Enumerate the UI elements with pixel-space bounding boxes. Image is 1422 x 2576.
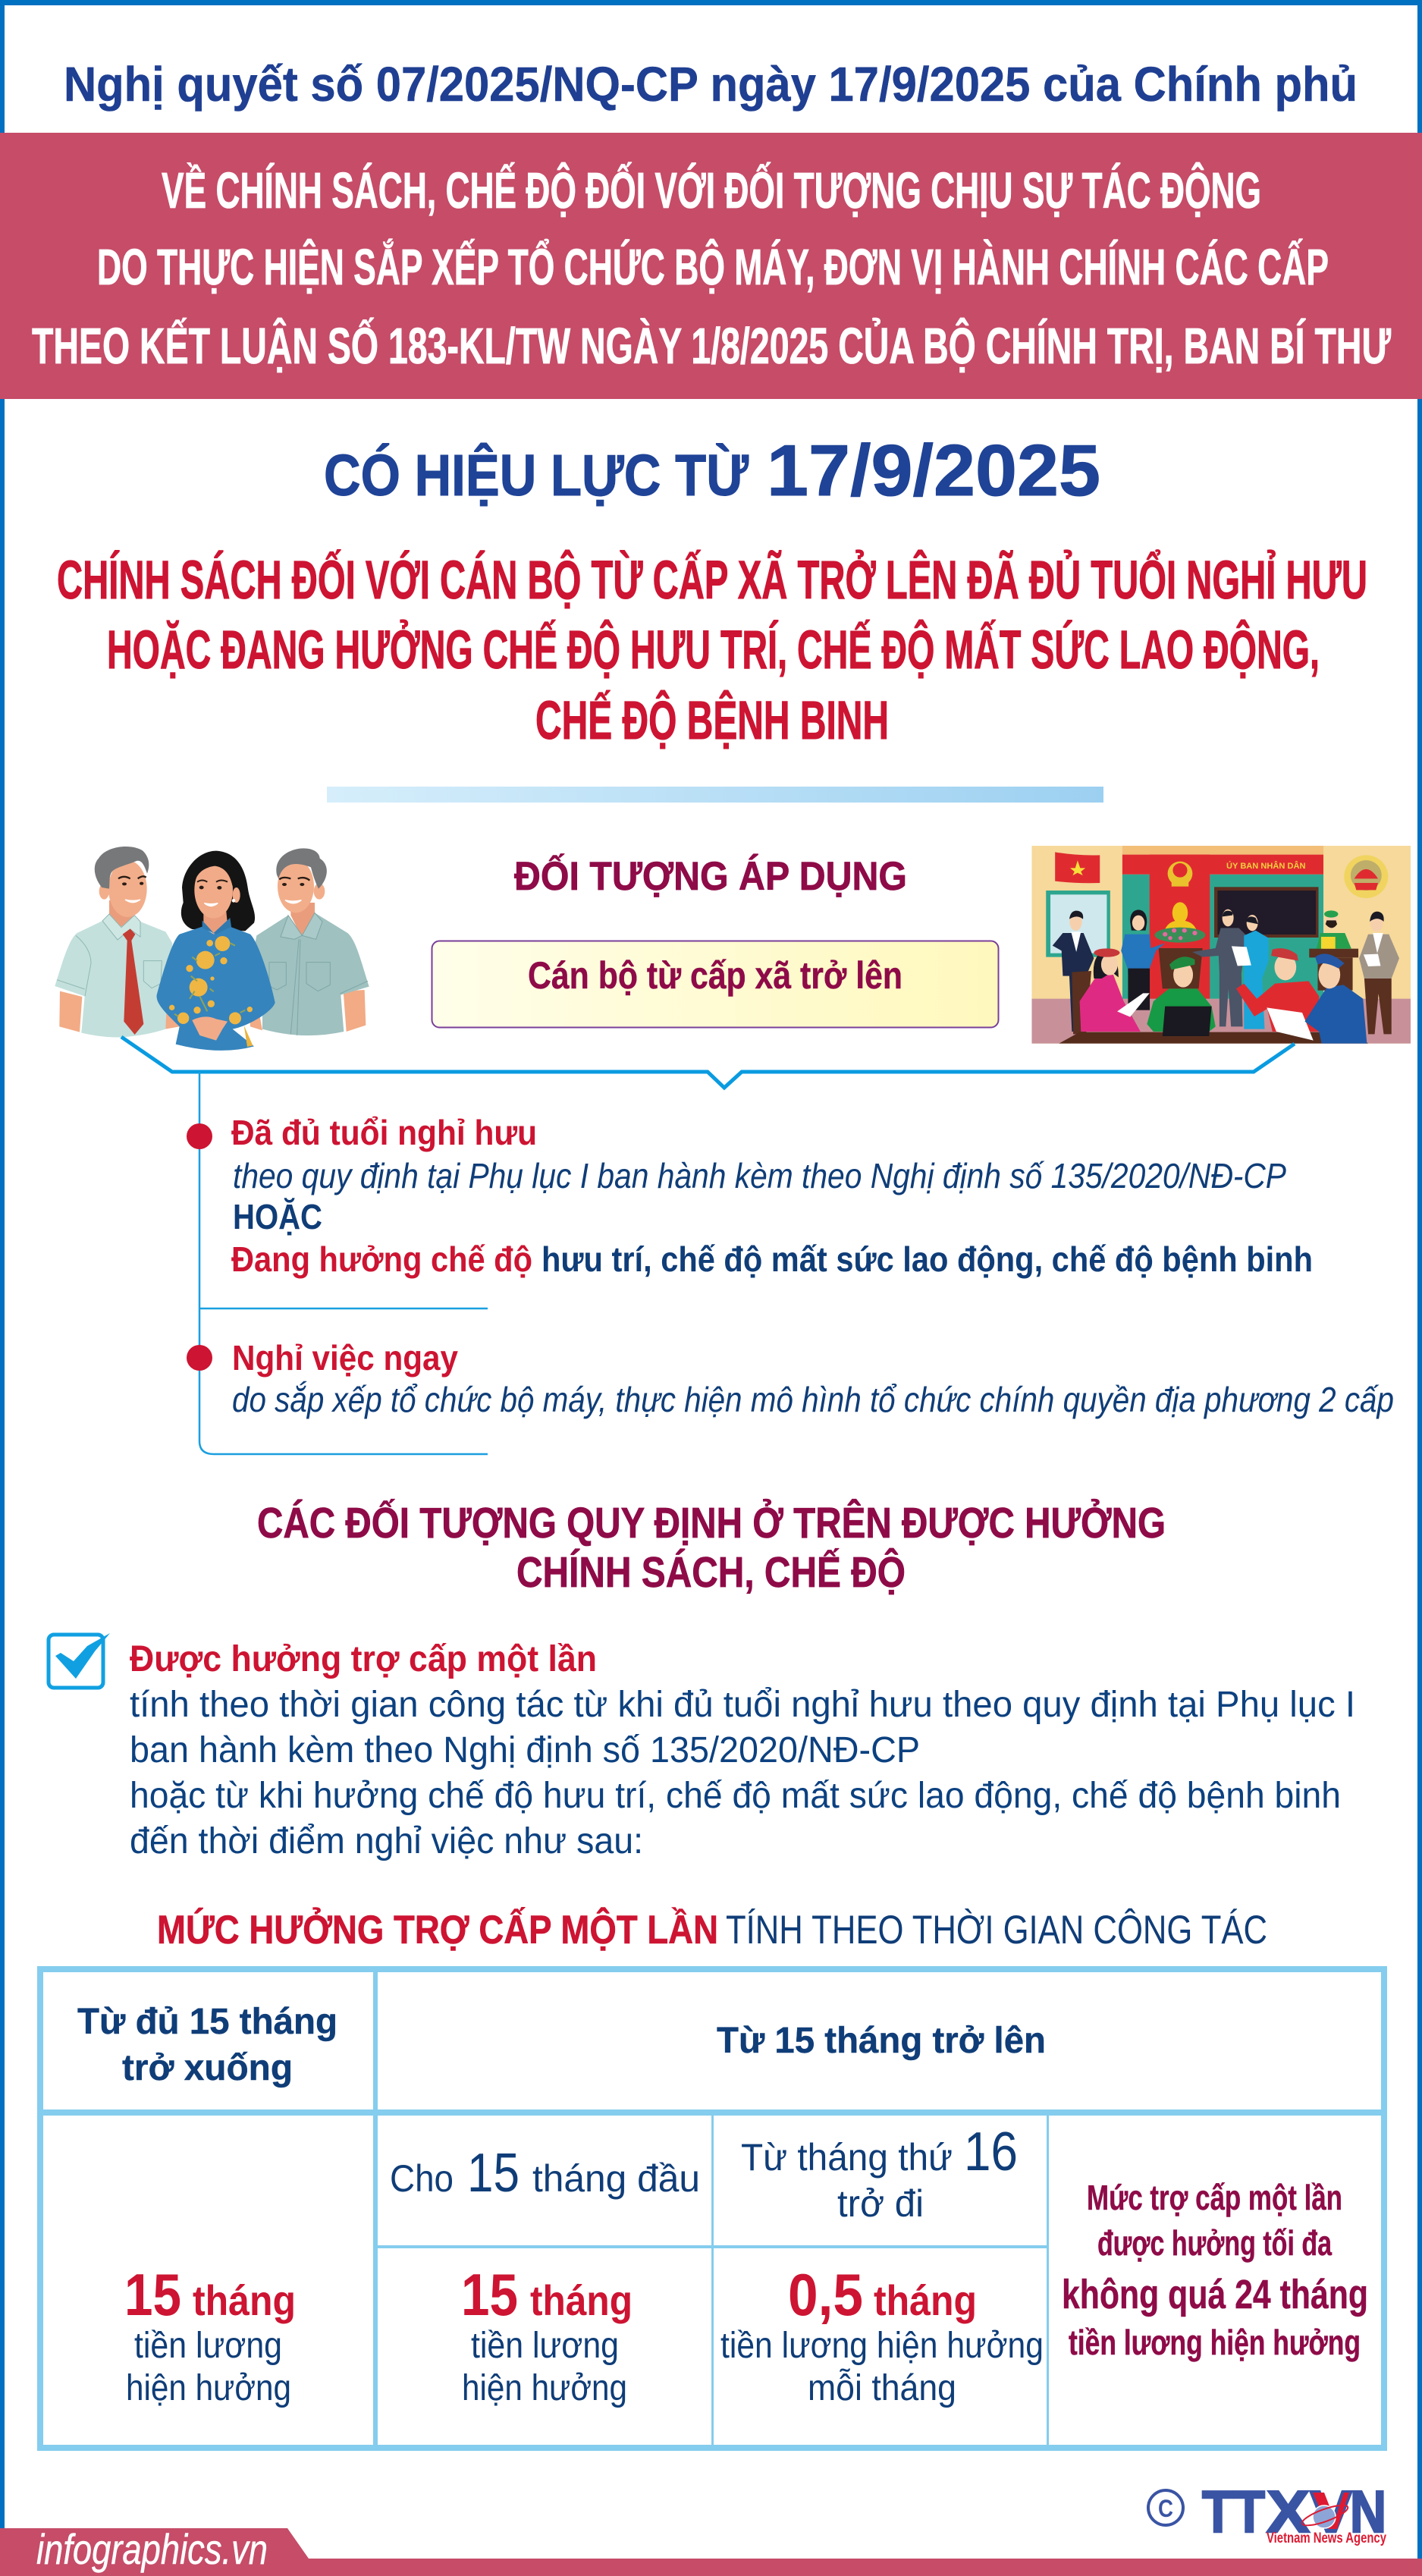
table	[1059, 1032, 1368, 1044]
header: up to 15 months: trở xuống	[122, 2048, 293, 2088]
sub-header: from 16th month	[741, 2122, 1018, 2225]
sub-header: first 15 months: Cho	[390, 2157, 454, 2200]
timeline lines	[199, 1072, 488, 1454]
cell: 0.5 month	[720, 2261, 1044, 2408]
sub-header: from 16th month: 16	[964, 2122, 1018, 2182]
title: Nghị quyết số 07/2025/NQ-CP ngày 17/9/2025 của Chính phủ	[64, 57, 1358, 112]
icon: checkbox	[49, 1633, 110, 1688]
table heading	[157, 1906, 1267, 1952]
logo: TTXVN: X	[1267, 2478, 1310, 2545]
standing woman	[1121, 909, 1165, 1010]
benefit paragraph: hoặc từ khi hưởng chế độ hưu trí, chế độ mất sức lao động, chế độ bệnh binh	[130, 1776, 1341, 1816]
image: commune officials scene	[1031, 846, 1411, 1044]
cell: 15 months: 15	[124, 2261, 181, 2328]
bullet	[187, 1345, 212, 1371]
sub-header: first 15 months	[390, 2143, 700, 2204]
gradient divider	[327, 787, 1103, 803]
icon: three officials	[55, 847, 369, 1051]
benefit table	[37, 1966, 1387, 2451]
header: up to 15 months	[77, 2002, 337, 2088]
section heading: benefits: CÁC ĐỐI TƯỢNG QUY ĐỊNH Ở TRÊN ĐƯỢC HƯỞNG	[257, 1498, 1166, 1547]
cell: 15 months: hiện hưởng	[126, 2368, 291, 2408]
cell: maximum: được hưởng tối đa	[1097, 2223, 1332, 2263]
effective date: CÓ HIỆU LỰC TỪ	[324, 442, 749, 508]
cell: 15 months second	[461, 2261, 633, 2408]
table heading: MỨC HƯỞNG TRỢ CẤP MỘT LẦN	[157, 1906, 718, 1952]
cell: 15 months	[124, 2261, 296, 2408]
logo: TTXVN: TT	[1202, 2478, 1265, 2545]
cell: 15 months second: 15	[461, 2261, 518, 2328]
subject box: Cán bộ từ cấp xã trở lên	[528, 954, 902, 997]
benefit paragraph	[130, 1639, 1355, 1861]
copyright mark: C	[1158, 2495, 1173, 2522]
cell: 0.5 month: 0,5	[788, 2261, 863, 2328]
benefit paragraph: ban hành kèm theo Nghị định số 135/2020/NĐ-CP	[130, 1730, 920, 1770]
red heading: CHẾ ĐỘ BỆNH BINH	[535, 690, 889, 751]
footer bar	[0, 2525, 1422, 2576]
cell: 15 months second: tiền lương	[471, 2326, 619, 2366]
cell: 0.5 month: tiền lương hiện hưởng	[720, 2326, 1044, 2366]
logo: TTXVN: Vietnam News Agency	[1267, 2530, 1386, 2546]
footer bar: infographics.vn	[36, 2525, 268, 2573]
banner	[0, 133, 1422, 399]
condition 1: Đã đủ tuổi nghỉ hưu	[231, 1113, 537, 1152]
table grid	[37, 1966, 1387, 2451]
man left	[55, 847, 180, 1037]
header: up to 15 months: Từ đủ 15 tháng	[77, 2002, 337, 2042]
seated red	[1236, 948, 1319, 1041]
condition 2: Nghỉ việc ngay	[232, 1338, 458, 1378]
cell: maximum	[1062, 2178, 1368, 2362]
seated pink	[1072, 948, 1150, 1034]
logo: TTXVN	[1148, 2478, 1386, 2546]
green man	[1317, 910, 1351, 949]
cell: 15 months: tiền lương	[134, 2326, 282, 2366]
cell: 0.5 month: mỗi tháng	[808, 2367, 956, 2408]
cell: 0.5 month: tháng	[874, 2276, 977, 2324]
seated blue	[1304, 953, 1367, 1044]
cell: 15 months second: tháng	[530, 2276, 633, 2324]
connector bracket	[121, 1037, 1295, 1088]
subject box	[432, 941, 998, 1027]
logo: TTXVN: N	[1350, 2478, 1386, 2545]
image: commune officials scene: ÚY BAN NHÂN DÂN	[1226, 861, 1305, 871]
benefit paragraph: Được hưởng trợ cấp một lần	[130, 1639, 597, 1679]
effective date	[324, 430, 1100, 511]
condition 1: Đang hưởng chế độ	[231, 1239, 532, 1279]
seated green with laptop	[1147, 957, 1216, 1036]
condition 2	[187, 1338, 1394, 1419]
man right	[246, 848, 369, 1035]
section heading: benefits	[257, 1498, 1166, 1597]
man right	[1359, 912, 1399, 1034]
condition 1: HOẶC	[233, 1197, 322, 1236]
woman	[157, 851, 275, 1051]
cell: 15 months: tháng	[193, 2276, 296, 2324]
sub-header: from 16th month: Từ tháng thứ	[741, 2136, 953, 2179]
cell: maximum: Mức trợ cấp một lần	[1087, 2178, 1342, 2217]
condition 1: hưu trí, chế độ mất sức lao động, chế độ bệnh binh	[541, 1239, 1313, 1279]
condition 1	[187, 1113, 1313, 1279]
benefit paragraph: tính theo thời gian công tác từ khi đủ tuổi nghỉ hưu theo quy định tại Phụ lục I	[130, 1685, 1355, 1725]
sub-header: first 15 months: 15	[467, 2143, 520, 2204]
box heading: applicable subjects: ĐỐI TƯỢNG ÁP DỤNG	[514, 853, 907, 899]
effective date: 17/9/2025	[767, 430, 1100, 511]
condition 1: theo quy định tại Phụ lục I ban hành kèm theo Nghị định số 135/2020/NĐ-CP	[233, 1156, 1286, 1195]
bullet	[187, 1123, 212, 1149]
logo: TTXVN: V	[1310, 2478, 1352, 2545]
benefit paragraph: đến thời điểm nghỉ việc như sau:	[130, 1821, 643, 1861]
sub-header: from 16th month: trở đi	[837, 2182, 924, 2225]
header: from 15 months: Từ 15 tháng trở lên	[717, 2021, 1046, 2061]
copyright mark	[1148, 2490, 1183, 2525]
standing man left	[1053, 911, 1094, 1032]
standing man with pair	[1192, 909, 1269, 1029]
table heading: TÍNH THEO THỜI GIAN CÔNG TÁC	[726, 1908, 1267, 1952]
section heading: benefits: CHÍNH SÁCH, CHẾ ĐỘ	[516, 1547, 906, 1597]
red heading	[57, 550, 1367, 751]
cell: 15 months second: hiện hưởng	[462, 2368, 627, 2408]
sub-header: first 15 months: tháng đầu	[532, 2157, 700, 2200]
